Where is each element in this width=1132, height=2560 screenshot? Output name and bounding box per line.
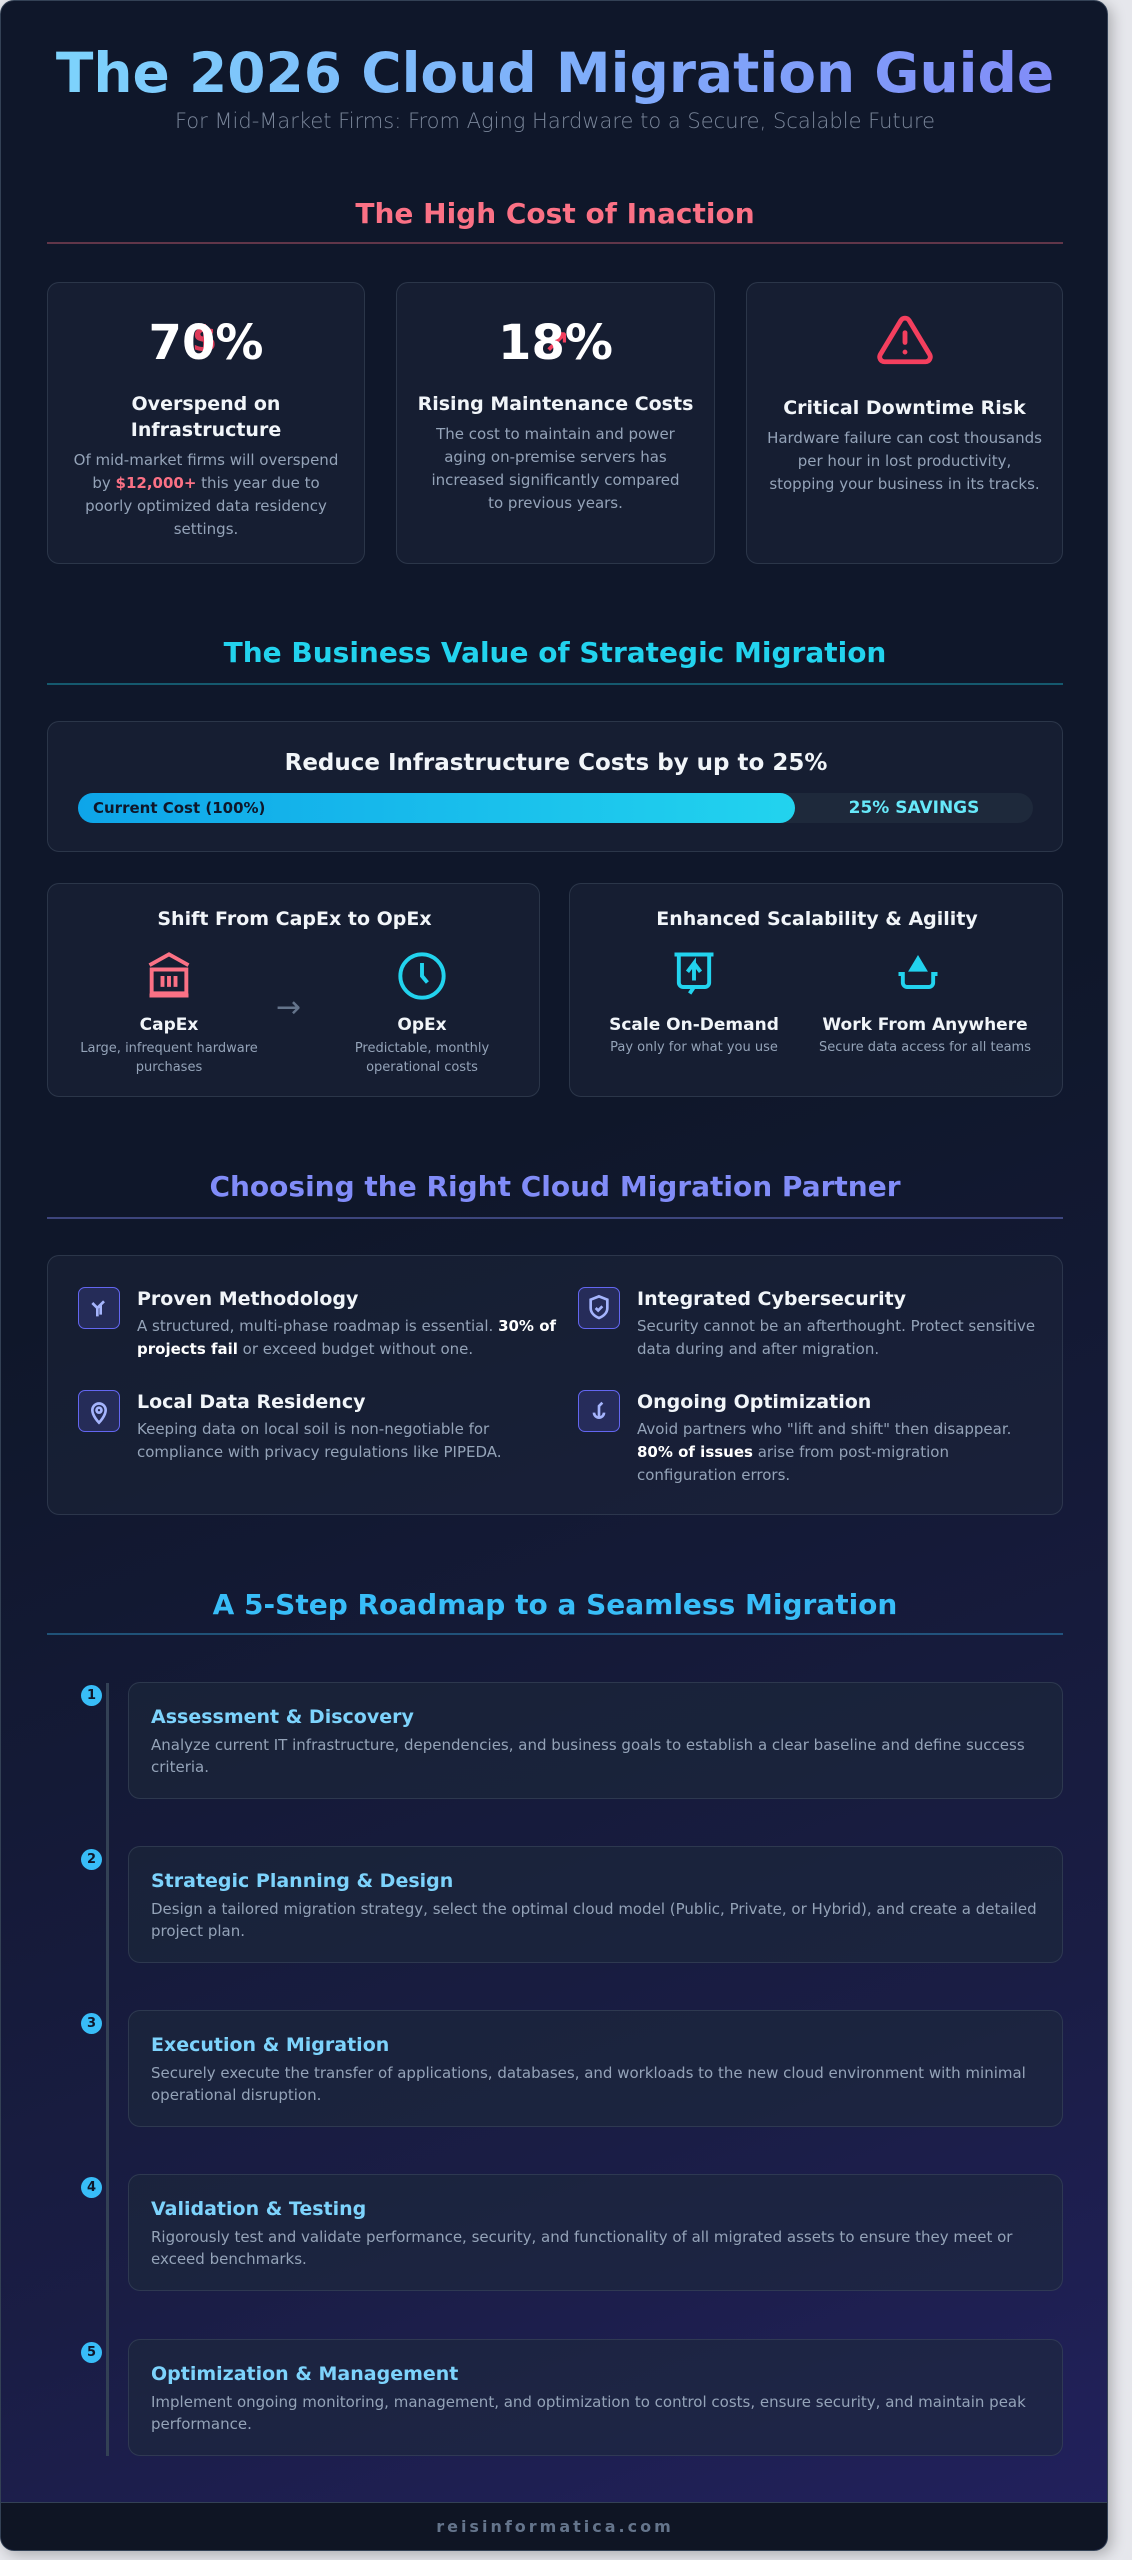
bar chart: 25% SAVINGS bbox=[849, 798, 979, 818]
panel: partner criteria: Security cannot be an afterthought. Protect sensitive data during and after migration. bbox=[637, 1317, 1035, 1358]
arrow: → bbox=[276, 990, 301, 1025]
bar chart: Current Cost (100%) bbox=[93, 799, 265, 817]
heading: choosing partner: Choosing the Right Cloud Migration Partner bbox=[209, 1170, 901, 1203]
panel: scalability: Enhanced Scalability & Agility bbox=[656, 908, 978, 930]
icon: bank bbox=[148, 952, 190, 998]
step 5: 5 bbox=[87, 2345, 96, 2360]
text: Optimization & Management bbox=[151, 2363, 458, 2385]
step 1 bbox=[81, 1685, 102, 1706]
panel: scalability bbox=[569, 883, 1063, 1097]
panel: capex to opex: Predictable, monthly operational costs bbox=[355, 1041, 489, 1075]
panel: overspend: $ bbox=[192, 319, 217, 360]
step 2: 2 bbox=[87, 1852, 96, 1867]
panel: partner criteria: Proven Methodology bbox=[137, 1288, 358, 1310]
step 4: 4 bbox=[87, 2180, 96, 2195]
panel: scalability: Pay only for what you use bbox=[610, 1040, 778, 1055]
text: Design a tailored migration strategy, select the optimal cloud model (Public, Private, or Hybrid), and create a detailed project plan. bbox=[151, 1900, 1037, 1940]
panel: overspend bbox=[47, 282, 365, 564]
step 4 bbox=[81, 2177, 102, 2198]
panel: scalability: Secure data access for all teams bbox=[819, 1040, 1031, 1055]
panel: partner criteria: Ongoing Optimization bbox=[637, 1391, 871, 1413]
step 2 bbox=[81, 1849, 102, 1870]
bar chart bbox=[78, 793, 1033, 823]
text: Strategic Planning & Design bbox=[151, 1870, 453, 1892]
panel: scalability: Work From Anywhere bbox=[822, 1015, 1028, 1035]
panel: cost reduction bar: Reduce Infrastructure Costs by up to 25% bbox=[285, 750, 827, 776]
panel: cost reduction bar bbox=[47, 721, 1063, 852]
panel: capex to opex: Shift From CapEx to OpEx bbox=[157, 908, 432, 930]
footer bbox=[1, 2502, 1109, 2552]
panel: capex to opex: OpEx bbox=[397, 1015, 447, 1035]
panel: capex to opex: CapEx bbox=[140, 1015, 198, 1035]
panel: partner criteria: Local Data Residency bbox=[137, 1391, 365, 1413]
text: Rigorously test and validate performance, security, and functionality of all migrated assets to ensure they meet or exceed benchmarks. bbox=[151, 2228, 1012, 2268]
icon: scale bbox=[674, 952, 714, 995]
text: Execution & Migration bbox=[151, 2034, 389, 2056]
text: Assessment & Discovery bbox=[151, 1706, 414, 1728]
panel: partner criteria: A structured, multi-phase roadmap is essential. 30% of projects fail or exceed budget without one. bbox=[137, 1317, 556, 1358]
step 1: 1 bbox=[87, 1688, 96, 1703]
heading: business value: The Business Value of Strategic Migration bbox=[224, 636, 886, 669]
step 3 bbox=[81, 2013, 102, 2034]
panel: downtime: Critical Downtime Risk bbox=[783, 397, 1026, 419]
text: Analyze current IT infrastructure, dependencies, and business goals to establish a clear baseline and define success criteria. bbox=[151, 1736, 1025, 1776]
footer: reisinformatica.com bbox=[436, 2517, 674, 2536]
text: Securely execute the transfer of applications, databases, and workloads to the new cloud environment with minimal operational disruption. bbox=[151, 2064, 1026, 2104]
panel: scalability: Scale On-Demand bbox=[609, 1015, 779, 1035]
panel: downtime: Hardware failure can cost thousands per hour in lost productivity, stopping your business in its tracks. bbox=[767, 429, 1042, 493]
panel: capex to opex bbox=[47, 883, 540, 1097]
panel: overspend: Of mid-market firms will overspend by $12,000+ this year due to poorly optimized data residency settings. bbox=[74, 451, 338, 538]
icon: warning bbox=[877, 316, 933, 364]
step 3: 3 bbox=[87, 2016, 96, 2031]
panel: overspend: Overspend on Infrastructure bbox=[131, 393, 281, 441]
panel: partner criteria: Avoid partners who "lift and shift" then disappear. 80% of issues arise from post-migration configuration errors. bbox=[637, 1420, 1011, 1484]
icon: work anywhere bbox=[898, 955, 938, 989]
icon: methodology bbox=[78, 1287, 120, 1329]
panel: downtime bbox=[746, 282, 1063, 564]
panel: maintenance bbox=[396, 282, 715, 564]
panel: maintenance: ↗ bbox=[543, 323, 570, 361]
text: Implement ongoing monitoring, management, and optimization to control costs, ensure security, and maintain peak performance. bbox=[151, 2393, 1026, 2433]
icon: optimization bbox=[578, 1390, 620, 1432]
panel: partner criteria: Keeping data on local soil is non-negotiable for compliance with privacy regulations like PIPEDA. bbox=[137, 1420, 502, 1461]
heading: high cost of inaction: The High Cost of Inaction bbox=[355, 197, 755, 230]
icon: shield bbox=[578, 1287, 620, 1329]
panel: maintenance: Rising Maintenance Costs bbox=[418, 393, 693, 415]
panel: maintenance: The cost to maintain and power aging on-premise servers has increased significantly compared to previous years. bbox=[431, 425, 680, 512]
icon: location bbox=[78, 1390, 120, 1432]
timeline line bbox=[106, 1683, 109, 2456]
panel: partner criteria bbox=[47, 1255, 1063, 1515]
panel: capex to opex: Large, infrequent hardware purchases bbox=[80, 1041, 258, 1075]
text: Validation & Testing bbox=[151, 2198, 366, 2220]
panel: partner criteria: Integrated Cybersecurity bbox=[637, 1288, 906, 1310]
panel: maintenance: 18% bbox=[498, 315, 613, 371]
heading: roadmap: A 5-Step Roadmap to a Seamless Migration bbox=[213, 1588, 897, 1621]
panel: overspend: 70% bbox=[149, 315, 263, 371]
subtitle: For Mid-Market Firms: From Aging Hardware to a Secure, Scalable Future bbox=[175, 109, 935, 133]
title: The 2026 Cloud Migration Guide bbox=[56, 41, 1054, 105]
icon: clock bbox=[398, 952, 446, 1000]
step 5 bbox=[81, 2342, 102, 2363]
